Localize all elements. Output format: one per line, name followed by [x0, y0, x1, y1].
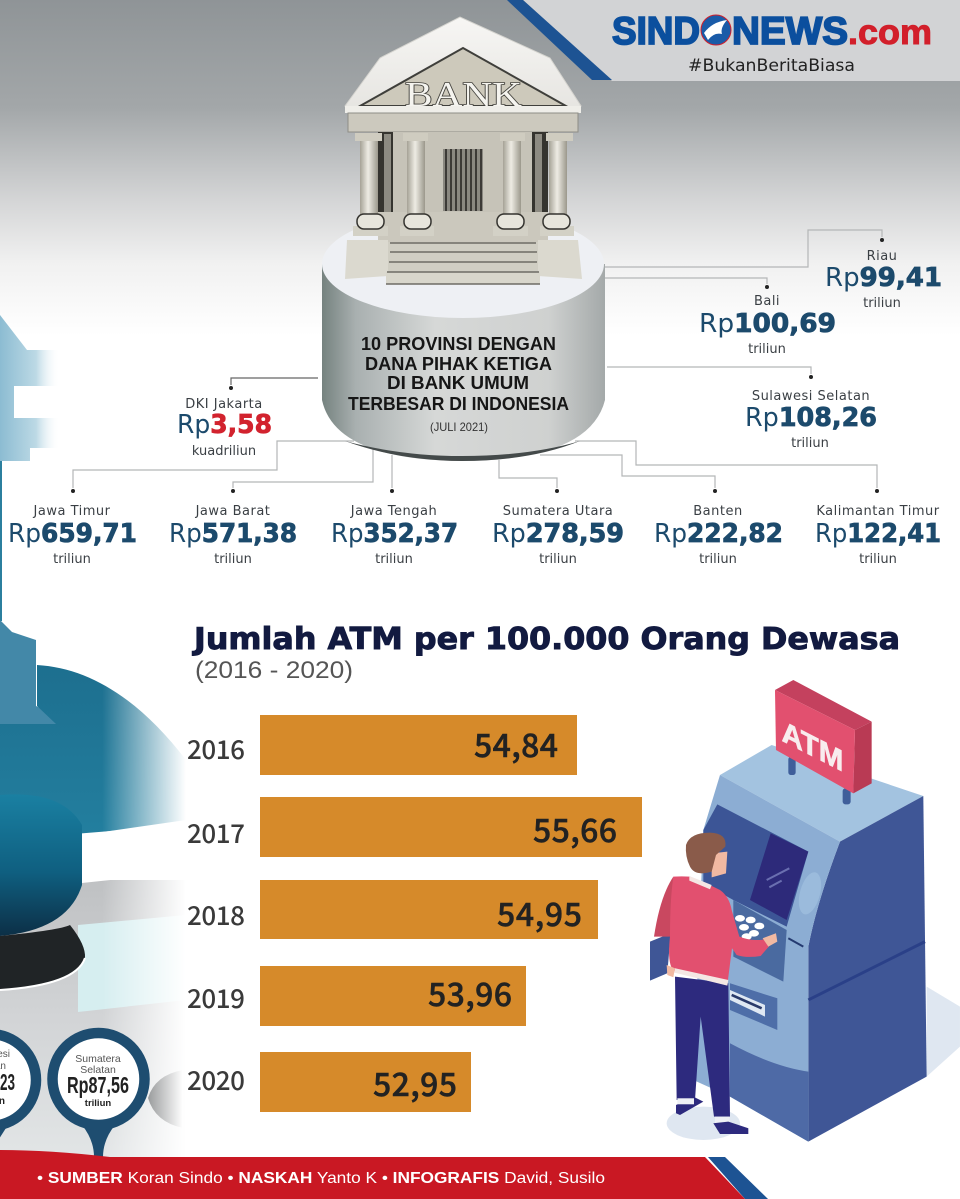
bar chart: 54,84 [474, 721, 558, 767]
province: Bali: triliun [748, 342, 786, 357]
province: Kalimantan Timur: triliun [859, 552, 897, 567]
bar chart: 2019 [187, 979, 245, 1016]
ATM front [693, 775, 840, 1142]
back wall [378, 132, 548, 214]
ATM top [720, 745, 923, 842]
icon: teal cylinder [0, 794, 85, 990]
map marker: partial [0, 1034, 36, 1142]
screen [750, 833, 808, 920]
province: DKI Jakarta: kuadriliun [192, 444, 256, 459]
floor [378, 212, 548, 242]
footer band [0, 1150, 768, 1199]
pedestal title: TERBESAR DI INDONESIA [348, 393, 569, 414]
province: Riau: Riau [867, 249, 897, 264]
logo [612, 10, 932, 53]
province: Sulawesi Selatan: triliun [791, 436, 829, 451]
province: Bali: Rp100,69 [699, 309, 836, 339]
province: Sumatera Utara: triliun [539, 552, 577, 567]
province: Sulawesi Selatan: Rp108,26 [745, 403, 877, 433]
province: Sulawesi Selatan [745, 389, 877, 451]
province: Jawa Tengah [331, 504, 458, 567]
left decorative teal monument base [0, 620, 186, 1157]
province: Kalimantan Timur: Kalimantan Timur [816, 504, 940, 519]
stoop and steps [345, 240, 582, 284]
sign [775, 680, 872, 804]
footer credits: • SUMBER Koran Sindo • NASKAH Yanto K • INFOGRAFIS David, Susilo [37, 1170, 605, 1187]
bar chart: 2020 [187, 1061, 245, 1098]
province: Banten: Rp222,82 [654, 519, 783, 549]
bar chart: 2017 [187, 814, 245, 851]
bank roof [345, 17, 581, 110]
province: Bali: Bali [754, 294, 780, 309]
header panel [507, 0, 960, 81]
province: DKI Jakarta: DKI Jakarta [185, 397, 263, 412]
map marker: Sumatera Selatan: triliun [85, 1098, 111, 1109]
bar chart: 2016 [187, 730, 245, 767]
province: Banten: Banten [693, 504, 743, 519]
province: Riau: triliun [863, 296, 901, 311]
man [650, 833, 777, 1134]
chart title: Jumlah ATM per 100.000 Orang Dewasa [192, 622, 900, 657]
screen recess [703, 804, 808, 927]
province: Jawa Barat: Rp571,38 [169, 519, 297, 549]
province: Sumatera Utara: Rp278,59 [492, 519, 624, 549]
pedestal title: DI BANK UMUM [387, 372, 529, 393]
province: DKI Jakarta: Rp3,58 [177, 410, 272, 440]
province: Jawa Tengah: triliun [375, 552, 413, 567]
province: Bali [699, 294, 836, 357]
province: Jawa Barat: triliun [214, 552, 252, 567]
bar chart: 55,66 [533, 806, 617, 852]
hashtag: #BukanBeritaBiasa [688, 56, 855, 76]
province: Jawa Barat: Jawa Barat [195, 504, 270, 519]
columns [353, 133, 574, 236]
pedestal title: 10 PROVINSI DENGAN [361, 333, 556, 354]
left decorative teal monument top [0, 315, 60, 621]
province: Jawa Timur: Rp659,71 [8, 519, 137, 549]
map marker: Sumatera Selatan [52, 1033, 144, 1157]
pedestal title: DANA PIHAK KETIGA [365, 353, 552, 374]
map marker: partial: 23 [0, 1069, 15, 1095]
bank sign: BANK [405, 75, 522, 114]
province: Kalimantan Timur: Rp122,41 [815, 519, 941, 549]
logo: NEWS [732, 10, 848, 53]
header blue stripe [507, 0, 612, 80]
bar chart: 54,95 [497, 890, 582, 936]
province: Banten [654, 504, 783, 567]
illustration: ATM machine with man [650, 680, 960, 1142]
bar chart: 53,96 [428, 970, 512, 1016]
province: Kalimantan Timur [815, 504, 941, 567]
icon: bank building [345, 17, 582, 284]
bar chart: 2018 [187, 896, 245, 933]
map marker: Sumatera Selatan: Rp87,56 [67, 1072, 129, 1098]
province: Jawa Timur [8, 504, 137, 567]
province: Riau [825, 249, 942, 311]
entablature [345, 106, 581, 113]
province: Sumatera Utara: Sumatera Utara [503, 504, 613, 519]
province: Jawa Timur: triliun [53, 552, 91, 567]
province: Jawa Tengah: Jawa Tengah [350, 504, 437, 519]
pediment [360, 48, 566, 106]
province: Sumatera Utara [492, 504, 624, 567]
bar chart [187, 715, 642, 1112]
chart subtitle: (2016 - 2020) [195, 657, 353, 684]
province: Sulawesi Selatan: Sulawesi Selatan [752, 389, 870, 404]
connector lines [71, 230, 884, 493]
map marker: Sumatera Selatan: Selatan [80, 1064, 116, 1076]
logo: SIND [612, 10, 700, 53]
province: Jawa Tengah: Rp352,37 [331, 519, 458, 549]
province: Banten: triliun [699, 552, 737, 567]
cash slot [730, 983, 777, 1030]
province: Jawa Timur: Jawa Timur [33, 504, 111, 519]
pedestal title [348, 333, 569, 434]
province: Jawa Barat [169, 504, 297, 567]
pedestal title: (JULI 2021) [430, 420, 488, 434]
door [443, 149, 483, 211]
map marker: Sumatera Selatan: Sumatera [75, 1053, 121, 1065]
bar chart: 52,95 [373, 1060, 457, 1106]
keypad [735, 915, 764, 940]
ATM side [808, 796, 927, 1142]
grey ellipse decoration [148, 1070, 183, 1128]
province: DKI Jakarta [177, 397, 272, 459]
logo: .com [848, 13, 932, 52]
sign: ATM [782, 713, 843, 779]
cylinder pedestal [322, 210, 605, 461]
province: Riau: Rp99,41 [825, 263, 942, 293]
